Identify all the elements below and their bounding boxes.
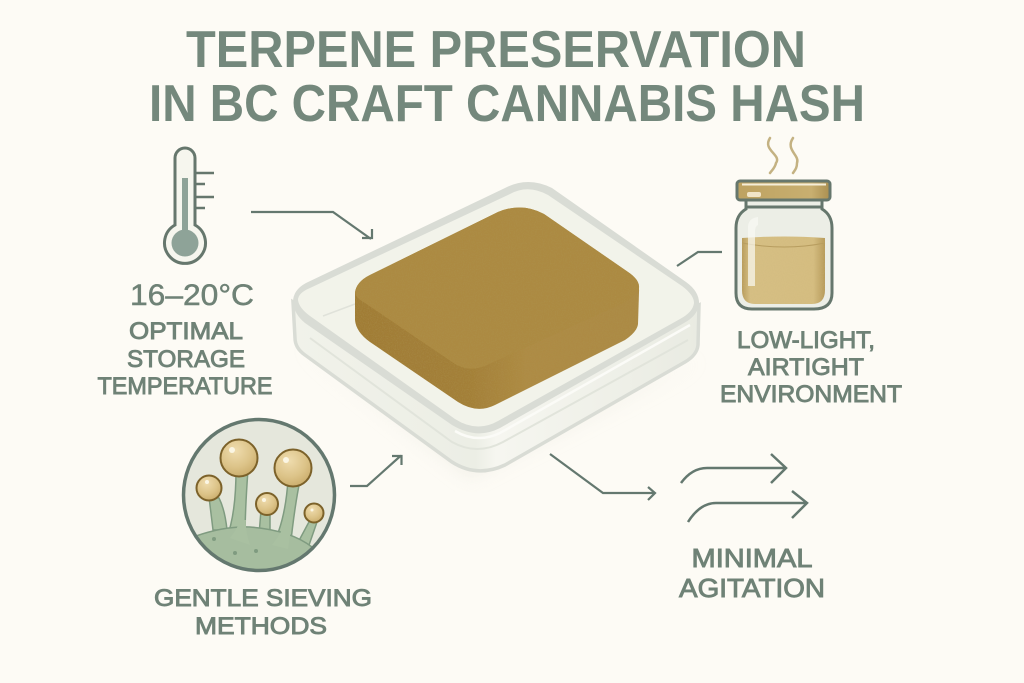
glass highlight bbox=[748, 217, 758, 286]
jar body bbox=[736, 200, 832, 309]
mound stem overlays bbox=[236, 520, 290, 536]
panel: tray with hash bbox=[293, 182, 700, 478]
temperature label bbox=[98, 318, 272, 400]
trichome stems bbox=[208, 475, 318, 544]
panel: sieving bbox=[154, 420, 372, 640]
tray rim bbox=[293, 182, 699, 433]
trichome heads bbox=[196, 440, 324, 522]
temperature label: OPTIMAL bbox=[129, 318, 243, 345]
arrow: jar to tray bbox=[677, 252, 722, 266]
tray outer wall bbox=[293, 302, 699, 471]
agitation label: AGITATION bbox=[679, 573, 825, 603]
icon: thermometer bbox=[164, 148, 214, 263]
tray shadow bbox=[300, 345, 700, 478]
title bbox=[149, 21, 865, 133]
sieving label bbox=[154, 585, 372, 640]
temperature label: TEMPERATURE bbox=[98, 373, 272, 400]
sieving label: GENTLE SIEVING bbox=[154, 585, 372, 612]
sieving label: METHODS bbox=[195, 613, 327, 640]
panel: temperature bbox=[98, 148, 272, 400]
arrow: temperature to tray bbox=[251, 212, 372, 239]
arrow: tray to agitation bbox=[550, 454, 655, 500]
agitation label: MINIMAL bbox=[692, 543, 812, 573]
jar label: ENVIRONMENT bbox=[720, 381, 902, 408]
icon: trichome circle bbox=[182, 418, 336, 572]
agitation label bbox=[679, 543, 825, 603]
panel: jar bbox=[720, 138, 902, 408]
lid bbox=[737, 181, 830, 200]
jar contents bbox=[742, 236, 825, 304]
panel: agitation bbox=[679, 454, 825, 603]
arrow: sieving to tray bbox=[350, 456, 402, 486]
tray inner floor bbox=[298, 189, 694, 427]
steam bbox=[768, 138, 797, 173]
hash block bbox=[355, 207, 639, 409]
jar label: LOW-LIGHT, bbox=[737, 327, 875, 354]
mound bbox=[197, 526, 312, 569]
jar label bbox=[720, 327, 902, 408]
rim highlight bbox=[455, 325, 690, 438]
temperature label: STORAGE bbox=[127, 346, 245, 373]
temperature value: 16–20°C bbox=[130, 279, 254, 312]
icon: jar bbox=[736, 138, 832, 309]
icon: flow arrows bbox=[681, 454, 807, 522]
title: TERPENE PRESERVATION bbox=[186, 21, 806, 79]
title: IN BC CRAFT CANNABIS HASH bbox=[149, 75, 865, 133]
jar label: AIRTIGHT bbox=[748, 354, 864, 381]
